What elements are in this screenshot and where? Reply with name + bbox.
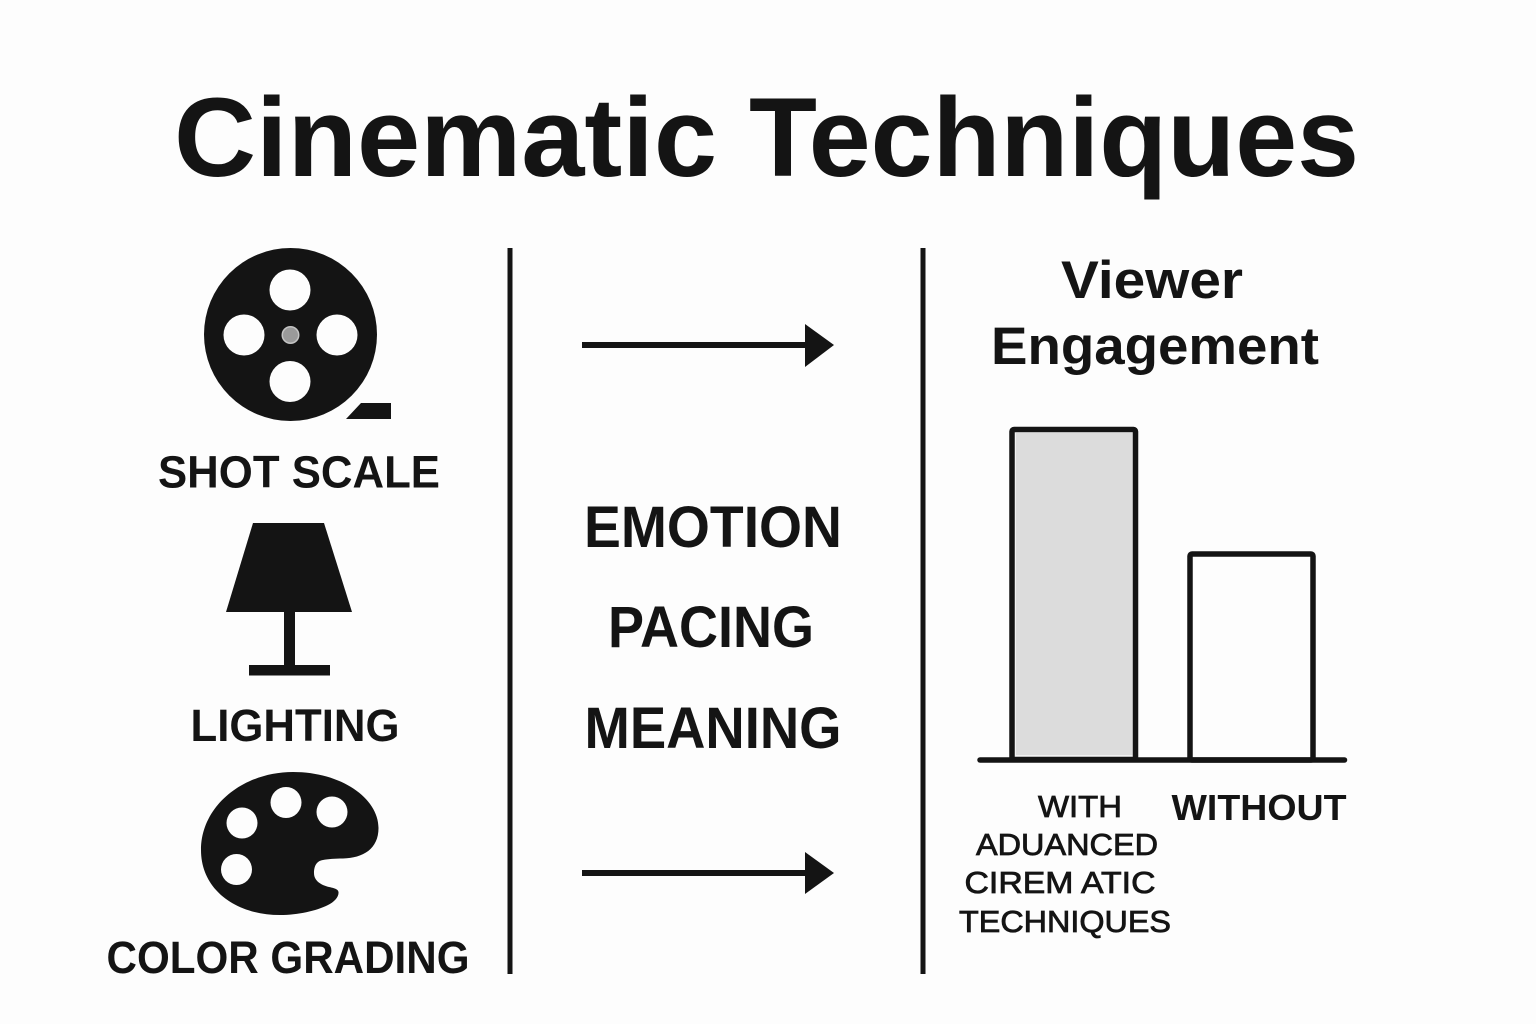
title: Cinematic <box>174 75 717 200</box>
label: with advanced techniques <box>959 789 1171 939</box>
title <box>174 75 1359 200</box>
label: meaning: MEANING <box>584 696 842 761</box>
icon: palette <box>201 772 378 915</box>
label: without: WITHOUT <box>1172 787 1346 828</box>
icon: lamp <box>226 523 352 676</box>
label: with advanced techniques: CIREM ATIC <box>964 865 1156 900</box>
title: Techniques <box>749 75 1359 200</box>
label: emotion: EMOTION <box>584 495 842 560</box>
label: with advanced techniques: ADUANCED <box>976 827 1158 862</box>
arrow: bottom <box>582 852 834 894</box>
bar: without <box>1190 554 1313 760</box>
bar: with advanced techniques <box>1012 430 1136 760</box>
bar chart <box>980 430 1344 760</box>
arrow: top <box>582 324 834 367</box>
label: lighting: LIGHTING <box>190 700 400 751</box>
label: pacing: PACING <box>608 595 814 660</box>
chart heading <box>991 251 1319 376</box>
chart heading: Engagement <box>991 317 1319 376</box>
label: color grading: COLOR GRADING <box>106 932 470 983</box>
chart heading: Viewer <box>1061 251 1243 310</box>
label: with advanced techniques: WITH <box>1038 789 1122 824</box>
icon: film reel <box>204 248 391 421</box>
label: with advanced techniques: TECHNIQUES <box>959 904 1171 939</box>
label: shot scale: SHOT SCALE <box>158 446 440 498</box>
